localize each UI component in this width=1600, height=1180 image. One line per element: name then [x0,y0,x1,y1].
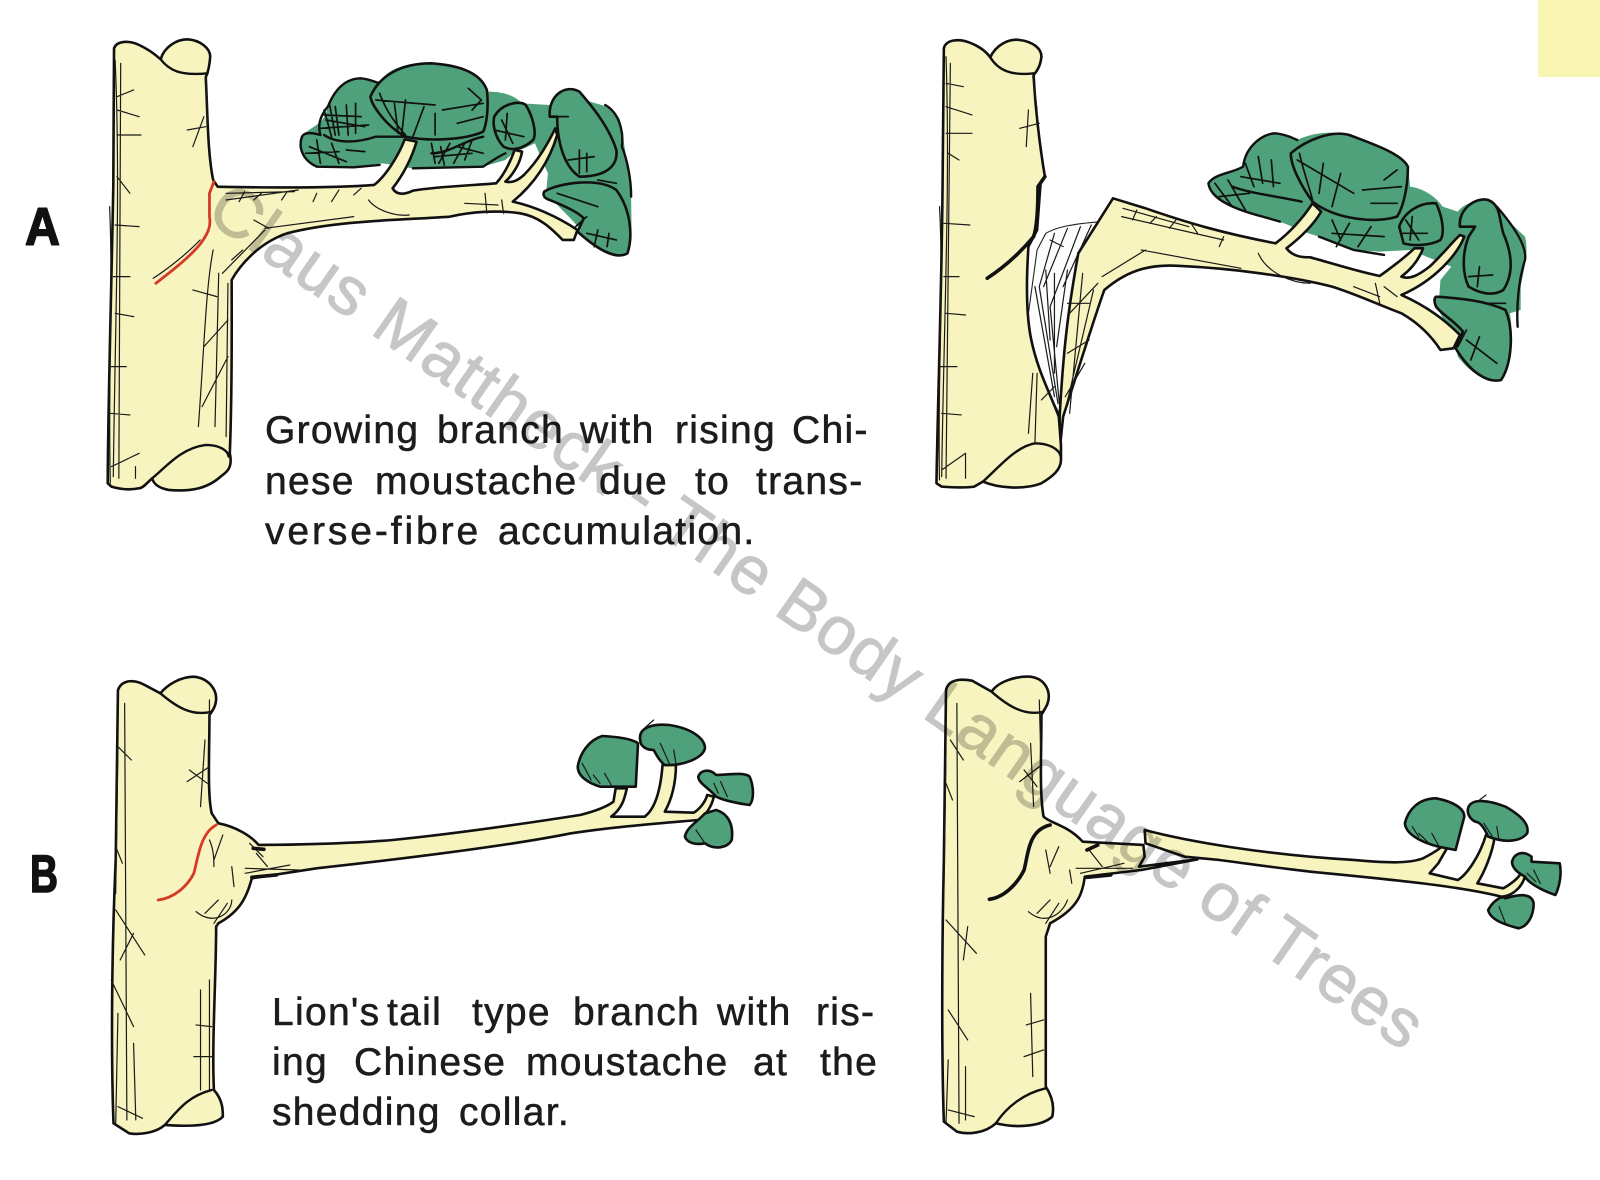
caption A: accumulation. [498,510,756,553]
panel: B left, lion's tail branch with shedding collar [111,677,753,1134]
bark and collar hatching [944,700,1133,1123]
caption B: Chinese [354,1041,518,1084]
torn fibre strip [1028,222,1102,417]
panel: A right, branch failed and torn open [936,40,1526,488]
trunk and lion's tail branch body [112,677,714,1134]
caption A: to [695,460,742,503]
caption A: moustache [375,460,590,503]
trunk and branch body [108,39,578,490]
caption A: Chi- [792,409,869,452]
broken branch body [1060,198,1464,450]
foliage cluster [578,720,753,847]
black moustache crack [989,825,1050,899]
branch stump and trunk [942,677,1198,1133]
front foliage blobs [1291,134,1511,381]
caption B: shedding [272,1091,453,1134]
caption A: verse-fibre [265,510,495,553]
caption B: with [716,991,804,1034]
label B: B [30,845,58,904]
caption A: due [599,460,680,503]
caption A: branch [437,409,576,452]
broken outer branch [1145,830,1525,897]
caption A: nese [265,460,367,503]
panel: B right, broken lion's tail branch [942,677,1561,1133]
red moustache line [158,825,216,900]
caption B: at [753,1041,800,1084]
caption B: ing [272,1041,340,1084]
label A: A [25,198,60,257]
caption A: Growing [265,409,431,452]
trunk cut ends [992,692,1046,1123]
caption B: type [472,991,563,1034]
caption A: with [579,409,667,452]
watermark: Claus Mattheck - The Body Language of Trees [195,168,1439,1064]
foliage mass behind branch [1208,133,1526,380]
foliage mass behind branch [301,63,631,255]
caption A: rising [675,409,788,452]
bark hatching [110,60,504,483]
bark and fibre hatching [939,57,1397,480]
caption B: Lion's [272,991,393,1034]
caption B: branch [573,991,712,1034]
caption B: ris- [816,991,875,1034]
front foliage blobs [370,63,631,255]
caption A: trans- [756,460,864,503]
bark and collar hatching [111,700,299,1123]
caption B: the [820,1041,878,1084]
caption B: tail [387,991,454,1034]
black moustache crack [987,177,1045,278]
caption B: collar. [459,1091,570,1134]
dark knot at branch base [252,848,276,877]
yellow corner tab [1538,0,1600,77]
panel: A left, growing branch with rising moustache [108,39,631,490]
dark knot at stump base [1087,845,1111,877]
trunk cut ends [983,57,1061,482]
trunk cut ends [160,693,212,1125]
red moustache line [153,182,214,283]
foliage cluster [1405,795,1561,928]
trunk [936,40,1061,488]
caption B: moustache [526,1041,741,1084]
trunk cut ends [152,59,229,478]
